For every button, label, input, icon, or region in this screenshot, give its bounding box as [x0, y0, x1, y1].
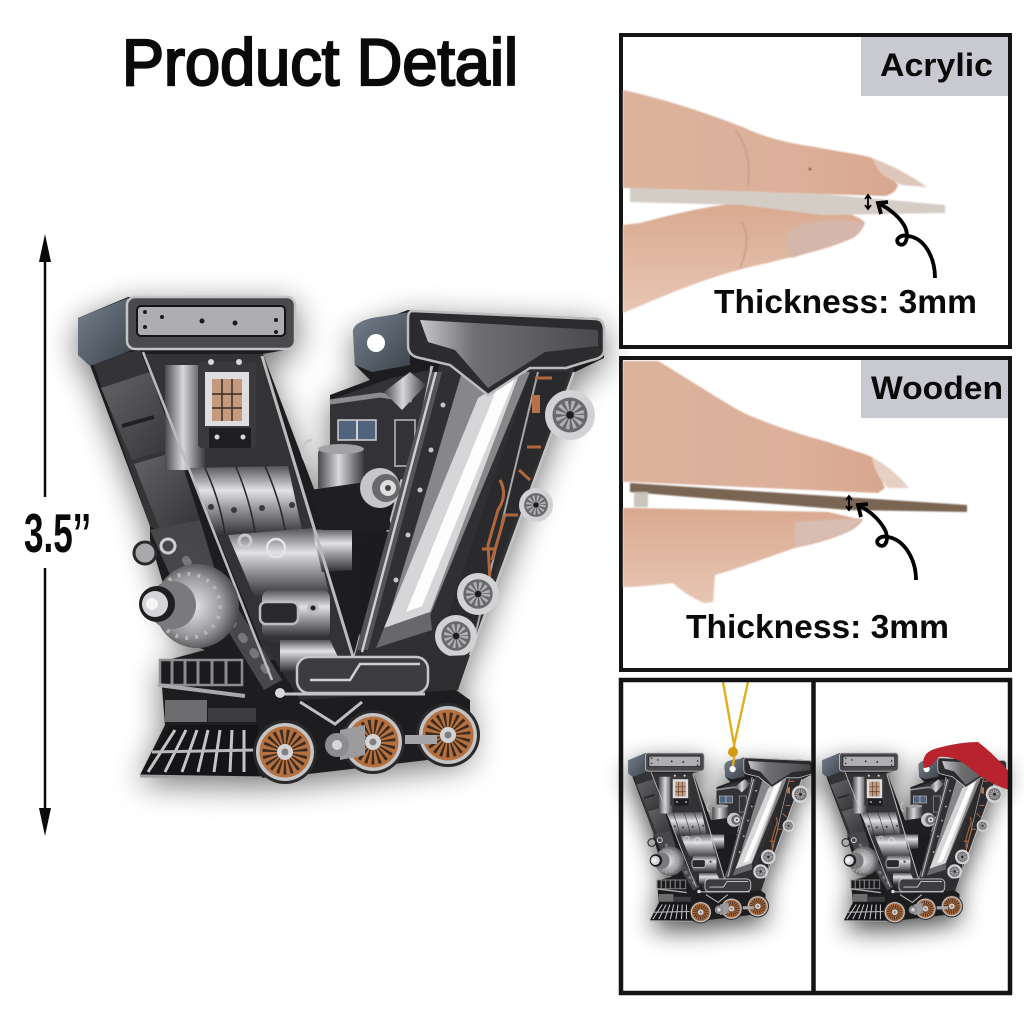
dimension arrow: 3.5 inch height: [39, 234, 51, 836]
material name: Wooden: [871, 370, 1003, 406]
material name: Acrylic: [880, 47, 993, 83]
dimension label: 3.5’’: [24, 502, 91, 564]
red ribbon: [923, 742, 1009, 790]
thickness label: Thickness: 3mm: [714, 283, 977, 320]
panel: wooden: [621, 358, 1010, 670]
title: Product Detail: [122, 25, 518, 99]
ornament main: locomotive letter V: [78, 296, 604, 786]
panel: hanging options: [621, 680, 1010, 993]
ornament with gold string: [628, 682, 812, 930]
thickness marker: [846, 496, 852, 510]
divider and frame on top of shadows: [621, 680, 1010, 993]
hand holding acrylic sheet: [623, 90, 945, 313]
material tag: [861, 37, 1008, 96]
panel: acrylic: [621, 35, 1010, 347]
thickness label: Thickness: 3mm: [686, 608, 949, 645]
hand holding wooden sheet: [623, 361, 967, 603]
curly arrow: [858, 504, 916, 580]
curly arrow: [878, 202, 935, 278]
thickness marker: [865, 195, 871, 209]
gold string: [723, 682, 748, 766]
ornament with red ribbon: [822, 742, 1009, 930]
material tag: [861, 360, 1008, 418]
